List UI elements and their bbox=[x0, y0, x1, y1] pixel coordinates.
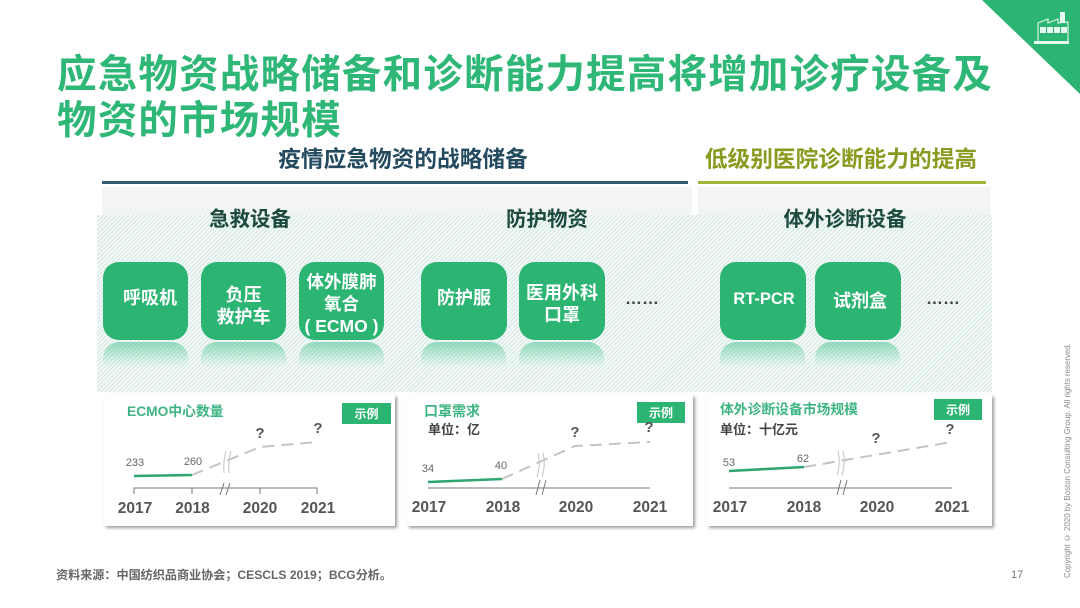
chart card: ECMO centres bbox=[104, 395, 395, 526]
card: ECMO bbox=[299, 262, 384, 340]
chart card: mask demand: 口罩需求 bbox=[424, 403, 480, 419]
card: surgical mask: 口罩 bbox=[544, 304, 580, 324]
chart card: IVD market size: 2017 bbox=[713, 499, 747, 516]
copyright note: Copyright © 2020 by Boston Consulting Group. All rights reserved. bbox=[1063, 343, 1072, 578]
chart card: mask demand: 2018 bbox=[486, 499, 521, 516]
category heading: protective supplies: 防护物资 bbox=[506, 208, 588, 231]
card: ventilator bbox=[103, 262, 188, 340]
card: ventilator: 呼吸机 bbox=[123, 288, 177, 308]
chart card: IVD market size: 体外诊断设备市场规模 bbox=[720, 401, 858, 417]
chart card: IVD market size: 62 bbox=[797, 453, 809, 465]
card: RT-PCR bbox=[720, 262, 806, 340]
chart card: IVD market size: 单位：十亿元 bbox=[720, 422, 798, 437]
chart card: ECMO centres: ? bbox=[255, 425, 265, 442]
card: test kit: 试剂盒 bbox=[833, 291, 887, 311]
section heading: strategic reserve: 疫情应急物资的战略储备 bbox=[278, 146, 528, 172]
ellipsis: protective supplies: …… bbox=[625, 289, 659, 308]
card: surgical mask bbox=[519, 262, 605, 340]
section rule: diagnostics capability bbox=[698, 181, 986, 184]
title: 物资的市场规模 bbox=[57, 98, 342, 142]
card: surgical mask: 医用外科 bbox=[526, 282, 598, 302]
chart card: IVD market size: 53 bbox=[723, 457, 735, 469]
chart card: IVD market size: ? bbox=[945, 421, 955, 438]
chart card: ECMO centres: 2021 bbox=[301, 500, 336, 517]
section rule: strategic reserve bbox=[102, 181, 688, 184]
chart card: IVD market size: 示例 bbox=[946, 403, 970, 417]
card: protective suit: 防护服 bbox=[437, 288, 491, 308]
card: protective suit bbox=[421, 262, 507, 340]
card: negative-pressure ambulance: 救护车 bbox=[216, 307, 270, 327]
panel: hatched background bbox=[97, 187, 992, 392]
card: ECMO: ( ECMO ) bbox=[305, 316, 378, 336]
page number: 17 bbox=[1011, 569, 1023, 581]
chart card: ECMO centres: 示例 bbox=[354, 407, 379, 421]
card: ECMO: 氧合 bbox=[324, 294, 359, 314]
chart card: IVD market size: 2020 bbox=[860, 499, 894, 516]
card: negative-pressure ambulance bbox=[201, 262, 286, 340]
card: negative-pressure ambulance: 负压 bbox=[226, 285, 262, 305]
chart card: mask demand: 2020 bbox=[559, 499, 593, 516]
chart card: mask demand: 40 bbox=[495, 460, 507, 472]
chart card: ECMO centres: 2020 bbox=[243, 500, 277, 517]
chart card: IVD market size: 2021 bbox=[935, 499, 970, 516]
title bbox=[57, 53, 993, 142]
chart card: mask demand: 2017 bbox=[412, 499, 446, 516]
chart card: mask demand: 示例 bbox=[649, 406, 673, 420]
card: RT-PCR: RT-PCR bbox=[733, 290, 795, 308]
category heading: IVD equipment: 体外诊断设备 bbox=[784, 208, 906, 231]
chart card: ECMO centres: ECMO中心数量 bbox=[127, 403, 224, 419]
chart card: IVD market size: 2018 bbox=[787, 499, 822, 516]
chart card: IVD market size bbox=[707, 395, 992, 526]
card: test kit bbox=[815, 262, 901, 340]
chart card: ECMO centres: 260 bbox=[184, 456, 202, 468]
chart card: mask demand: 34 bbox=[422, 463, 434, 475]
chart card: ECMO centres: 233 bbox=[126, 457, 144, 469]
title: 应急物资战略储备和诊断能力提高将增加诊疗设备及 bbox=[57, 53, 993, 97]
ellipsis: IVD equipment: …… bbox=[926, 289, 960, 308]
section heading: diagnostics capability: 低级别医院诊断能力的提高 bbox=[705, 146, 977, 172]
card: ECMO: 体外膜肺 bbox=[306, 272, 376, 292]
chart card: ECMO centres: 2017 bbox=[118, 500, 152, 517]
category heading: emergency equipment: 急救设备 bbox=[209, 208, 291, 231]
chart card: mask demand bbox=[407, 395, 693, 526]
chart card: mask demand: ? bbox=[570, 424, 580, 441]
chart card: ECMO centres: ? bbox=[313, 420, 323, 437]
chart card: mask demand: 单位：亿 bbox=[428, 422, 480, 437]
chart card: mask demand: ? bbox=[644, 419, 654, 436]
card reflections bbox=[103, 342, 900, 364]
chart card: mask demand: 2021 bbox=[633, 499, 668, 516]
source note: 资料来源：中国纺织品商业协会；CESCLS 2019；BCG分析。 bbox=[56, 568, 392, 582]
chart card: ECMO centres: 2018 bbox=[175, 500, 210, 517]
chart card: IVD market size: ? bbox=[871, 430, 881, 447]
corner triangle with factory icon bbox=[982, 0, 1080, 94]
